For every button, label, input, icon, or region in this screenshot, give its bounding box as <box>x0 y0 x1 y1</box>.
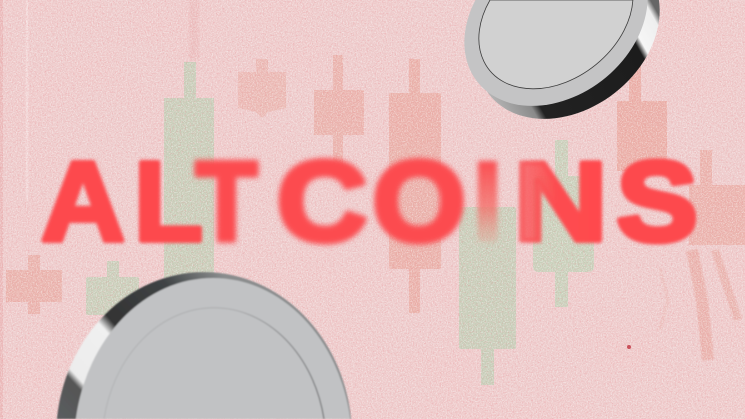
title: ALTCOINS <box>41 138 698 264</box>
red candle: far right <box>689 150 745 245</box>
red candle: far left <box>6 255 62 314</box>
letter S: S <box>617 138 698 264</box>
coin inner ring <box>479 0 633 89</box>
letter N: N <box>513 138 608 264</box>
candlestick chart <box>6 55 745 385</box>
coin rim <box>476 0 660 119</box>
letter T: T <box>196 138 258 264</box>
letter I: I <box>472 138 503 264</box>
letter L: L <box>134 138 203 264</box>
coin inner ring <box>104 308 324 419</box>
red candle: small top <box>238 59 286 118</box>
green candle: tall centre <box>459 207 516 385</box>
red candle: tall centre <box>389 59 441 313</box>
red candle: middle top <box>314 55 364 175</box>
red candle: upper right <box>617 66 667 171</box>
coin face <box>464 0 648 106</box>
green candle: right of centre <box>533 140 594 307</box>
green candle: tall left <box>164 62 214 278</box>
paper creases: lower right <box>660 250 738 360</box>
coin: bottom left <box>57 272 351 419</box>
coin: top right <box>464 0 660 119</box>
green candle: lower left <box>86 261 139 315</box>
letter A: A <box>41 138 125 264</box>
coin face <box>76 278 350 419</box>
coin rim <box>57 272 351 419</box>
letter O: O <box>373 138 466 264</box>
letter C: C <box>277 138 367 264</box>
